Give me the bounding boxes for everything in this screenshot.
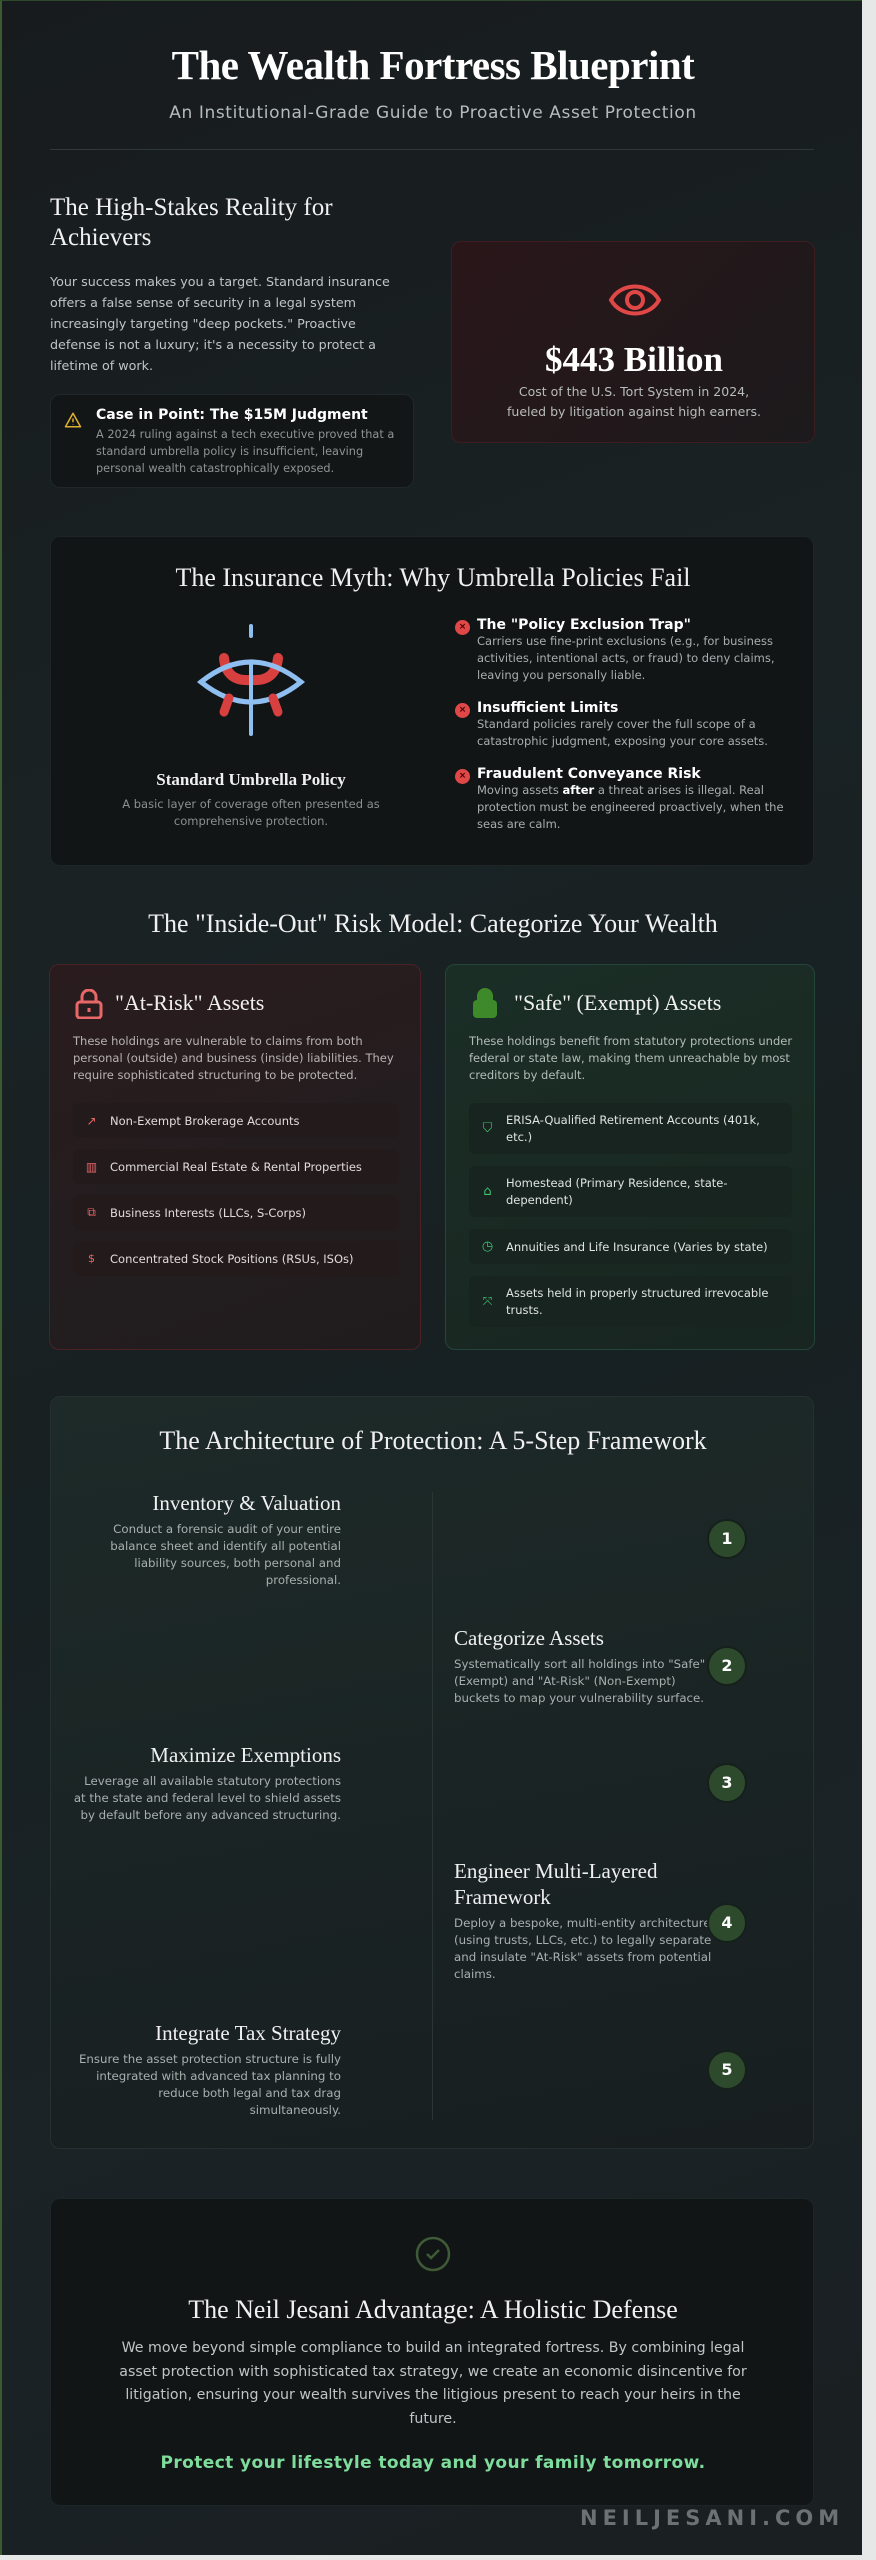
item: fraudulent conveyance <box>455 766 784 831</box>
failure list <box>455 617 784 831</box>
step 2 number <box>707 1646 747 1686</box>
step 2: Systematically sort all holdings into "Safe" (Exempt) and "At-Risk" (Non-Exempt) buckets to map your vulnerability surface. <box>454 1657 705 1705</box>
step 5 number <box>707 2050 747 2090</box>
callout: case in point <box>50 394 414 488</box>
item: ◷ <box>482 1239 493 1254</box>
stat caption: Cost of the U.S. Tort System in 2024, <box>519 384 749 399</box>
step 3 number <box>707 1763 747 1803</box>
item: Business Interests (LLCs, S-Corps) <box>110 1206 306 1220</box>
item <box>469 1276 792 1327</box>
icon: check circle <box>416 2236 450 2272</box>
stat panel <box>451 241 815 443</box>
panel: safe assets <box>445 964 815 1350</box>
step 2 number: 2 <box>721 1656 733 1675</box>
item <box>469 1229 792 1264</box>
stat caption <box>507 384 761 419</box>
panel: advantage <box>50 2198 814 2506</box>
tagline: Protect your lifestyle today and your family tomorrow. <box>161 2453 705 2473</box>
heading: The High-Stakes Reality for Achievers <box>50 194 333 251</box>
item: fraudulent conveyance: Fraudulent Conveyance Risk <box>477 766 701 782</box>
step 1: Conduct a forensic audit of your entire balance sheet and identify all potential liability sources, both personal and professional. <box>110 1522 341 1587</box>
step 1 number <box>707 1519 747 1559</box>
title: The Wealth Fortress Blueprint <box>172 42 694 88</box>
step 5 <box>79 2021 341 2117</box>
item: exclusion trap: Carriers use fine-print exclusions (e.g., for business activities, intentional acts, or fraud) to deny claims, leaving you personally liable. <box>477 634 775 682</box>
item: ⤧ <box>483 1294 492 1308</box>
step 4 number <box>707 1903 747 1943</box>
icon: broken umbrella <box>197 624 305 736</box>
item <box>73 1241 398 1276</box>
item: ↗ <box>86 1114 97 1128</box>
item: Concentrated Stock Positions (RSUs, ISOs) <box>110 1252 354 1266</box>
stat number: $443 Billion <box>545 340 723 379</box>
panel: at-risk assets <box>49 964 421 1350</box>
step 4 <box>454 1859 711 1981</box>
icon: warning <box>64 412 82 428</box>
step 2: Categorize Assets <box>454 1626 604 1650</box>
panel: insurance myth <box>50 536 814 866</box>
item: ▥ <box>86 1160 97 1174</box>
heading: The Neil Jesani Advantage: A Holistic Defense <box>188 2295 678 2324</box>
heading: The Architecture of Protection: A 5-Step Framework <box>159 1426 707 1455</box>
item <box>469 1103 792 1154</box>
step 4: Deploy a bespoke, multi-entity architecture (using trusts, LLCs, etc.) to legally separate and insulate "At-Risk" assets from potential claims. <box>454 1916 711 1981</box>
case heading: Case in Point: The $15M Judgment <box>96 407 368 423</box>
panel: 5-step framework <box>50 1396 814 2149</box>
step 5 number: 5 <box>721 2060 733 2079</box>
item: Homestead (Primary Residence, state-dependent) <box>506 1176 728 1206</box>
card title: "Safe" (Exempt) Assets <box>514 990 721 1015</box>
paragraph: We move beyond simple compliance to build an integrated fortress. By combining legal asset protection with sophisticated tax strategy, we create an economic disincentive for litigation, ensuring your wealth survives the litigious present to reach your heirs in the future. <box>119 2340 747 2426</box>
item <box>73 1103 398 1138</box>
item: ERISA-Qualified Retirement Accounts (401k, etc.) <box>506 1112 760 1144</box>
footer brand: NEILJESANI.COM <box>580 2506 844 2530</box>
item: $ <box>88 1252 95 1265</box>
item: ⌂ <box>483 1184 492 1199</box>
case text: A 2024 ruling against a tech executive proved that a standard umbrella policy is insufficient, leaving personal wealth catastrophically exposed. <box>96 428 394 475</box>
card title: "At-Risk" Assets <box>115 990 264 1015</box>
item: Non-Exempt Brokerage Accounts <box>110 1114 300 1128</box>
step 3: Maximize Exemptions <box>150 1743 341 1767</box>
step 2 <box>454 1626 705 1705</box>
subtitle: An Institutional-Grade Guide to Proactive Asset Protection <box>169 103 697 123</box>
stat caption: fueled by litigation against high earners. <box>507 404 761 419</box>
icon: open lock <box>76 989 102 1019</box>
item: insufficient limits <box>455 700 768 748</box>
step 3: Leverage all available statutory protections at the state and federal level to shield assets by default before any advanced structuring. <box>74 1774 341 1822</box>
step 1: Inventory & Valuation <box>152 1491 341 1515</box>
paragraph: Your success makes you a target. Standard insurance offers a false sense of security in a legal system increasingly targeting "deep pockets." Proactive defense is not a luxury; it's a necessity to protect a lifetime of work. <box>50 274 390 373</box>
item: insufficient limits: × <box>459 705 466 715</box>
step 3 <box>74 1743 341 1822</box>
step 3 number: 3 <box>721 1773 733 1792</box>
card description: These holdings are vulnerable to claims from both personal (outside) and business (inside) liabilities. They require sophisticated structuring to be protected. <box>73 1034 394 1082</box>
item <box>73 1149 398 1184</box>
umbrella label: Standard Umbrella Policy <box>156 770 346 789</box>
umbrella description: A basic layer of coverage often presented as comprehensive protection. <box>122 797 380 828</box>
step 4 number: 4 <box>721 1913 733 1932</box>
heading: The Insurance Myth: Why Umbrella Policies Fail <box>175 563 691 592</box>
item: Annuities and Life Insurance (Varies by state) <box>506 1240 768 1254</box>
item: fraudulent conveyance: Moving assets after a threat arises is illegal. Real protection must be engineered proactively, when the seas are calm. <box>477 783 784 831</box>
icon: closed lock <box>473 988 497 1018</box>
step 1 number: 1 <box>721 1529 733 1548</box>
item: insufficient limits: Standard policies rarely cover the full scope of a catastrophic judgment, exposing your core assets. <box>477 717 768 748</box>
item: exclusion trap: The "Policy Exclusion Trap" <box>477 617 691 633</box>
section: high-stakes reality <box>50 194 390 373</box>
step 1 <box>110 1491 341 1587</box>
item: exclusion trap <box>455 617 775 682</box>
item: Commercial Real Estate & Rental Properties <box>110 1160 362 1174</box>
item: ⧉ <box>87 1205 96 1219</box>
item <box>469 1166 792 1217</box>
item list <box>86 1114 362 1266</box>
item: fraudulent conveyance: × <box>459 771 466 781</box>
item: insufficient limits: Insufficient Limits <box>477 700 618 716</box>
heading: inside-out risk model: The "Inside-Out" Risk Model: Categorize Your Wealth <box>148 909 718 938</box>
item: exclusion trap: × <box>459 622 466 632</box>
item: ⛉ <box>483 1121 492 1136</box>
card description: These holdings benefit from statutory protections under federal or state law, making them unreachable by most creditors by default. <box>469 1034 792 1082</box>
step 5: Integrate Tax Strategy <box>155 2021 341 2045</box>
item: Assets held in properly structured irrevocable trusts. <box>506 1286 769 1316</box>
item <box>73 1195 398 1230</box>
item list <box>470 1104 769 1316</box>
icon: eye <box>608 284 662 316</box>
step 5: Ensure the asset protection structure is fully integrated with advanced tax planning to reduce both legal and tax drag simultaneously. <box>79 2052 341 2117</box>
step 4: Engineer Multi-Layered Framework <box>454 1859 658 1909</box>
